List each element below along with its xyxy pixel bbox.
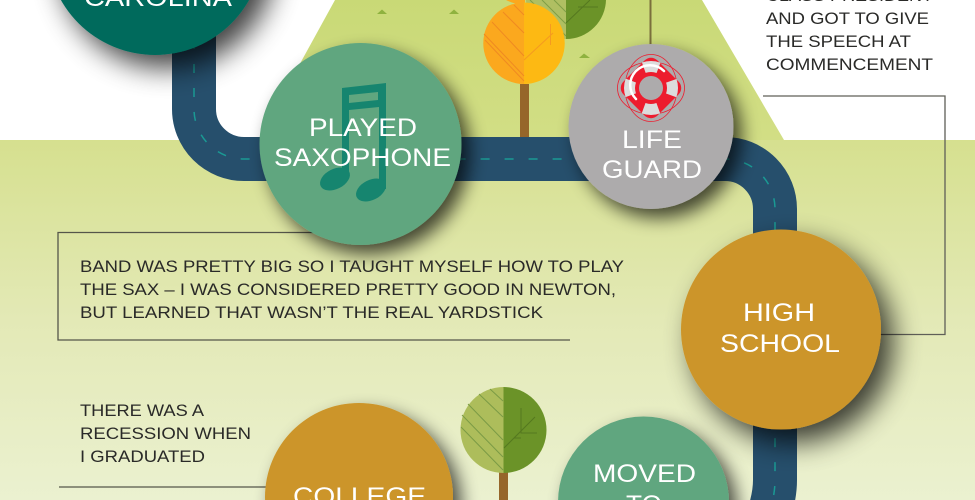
text: class president: THE SPEECH AT	[766, 33, 911, 51]
line: left callout box	[58, 232, 570, 340]
circle: played saxophone: SAXOPHONE	[274, 144, 451, 172]
tree: orange	[483, 2, 565, 138]
circle: life guard: LIFE	[622, 126, 682, 154]
icon: life buoy	[617, 54, 685, 122]
text: recession: THERE WAS A	[80, 402, 204, 420]
circle: high school: SCHOOL	[720, 330, 840, 358]
text: recession: RECESSION WHEN	[80, 425, 251, 443]
circle: moved to	[558, 416, 729, 500]
tree: green bottom	[460, 387, 546, 500]
text: recession: I GRADUATED	[80, 448, 205, 466]
text: band: BAND WAS PRETTY BIG SO I TAUGHT MYSELF HOW TO PLAY	[80, 258, 624, 276]
text: band: BUT LEARNED THAT WASN’T THE REAL YARDSTICK	[80, 304, 543, 322]
tree: orange top fragment	[506, 0, 525, 4]
circle: played saxophone	[260, 43, 462, 245]
circle: Carolina	[47, 0, 263, 55]
text: recession	[80, 402, 251, 466]
text: band	[80, 258, 624, 322]
line: recession underline	[59, 486, 280, 488]
background: white sky	[0, 0, 975, 140]
icon: music notes	[316, 83, 390, 206]
circle: life guard: GUARD	[602, 156, 702, 184]
circle: played saxophone: PLAYED	[309, 114, 417, 142]
road	[194, 0, 775, 500]
circle: moved to: MOVED	[593, 460, 696, 488]
text: class president	[766, 0, 933, 74]
circle: high school	[681, 230, 881, 430]
text: class president: AND GOT TO GIVE	[766, 10, 929, 28]
text: class president: COMMENCEMENT	[766, 56, 933, 74]
line: right callout box	[763, 96, 945, 334]
text: band: THE SAX – I WAS CONSIDERED PRETTY GOOD IN NEWTON,	[80, 281, 616, 299]
circle: college	[265, 403, 453, 500]
tree trunk: thin right	[650, 0, 652, 46]
tree: green behind	[526, 0, 606, 39]
small grass tufts	[377, 10, 590, 58]
background: green ground	[0, 140, 975, 500]
circle: life guard	[568, 44, 734, 209]
circle: high school: HIGH	[743, 299, 815, 327]
background: green hill	[258, 0, 784, 140]
